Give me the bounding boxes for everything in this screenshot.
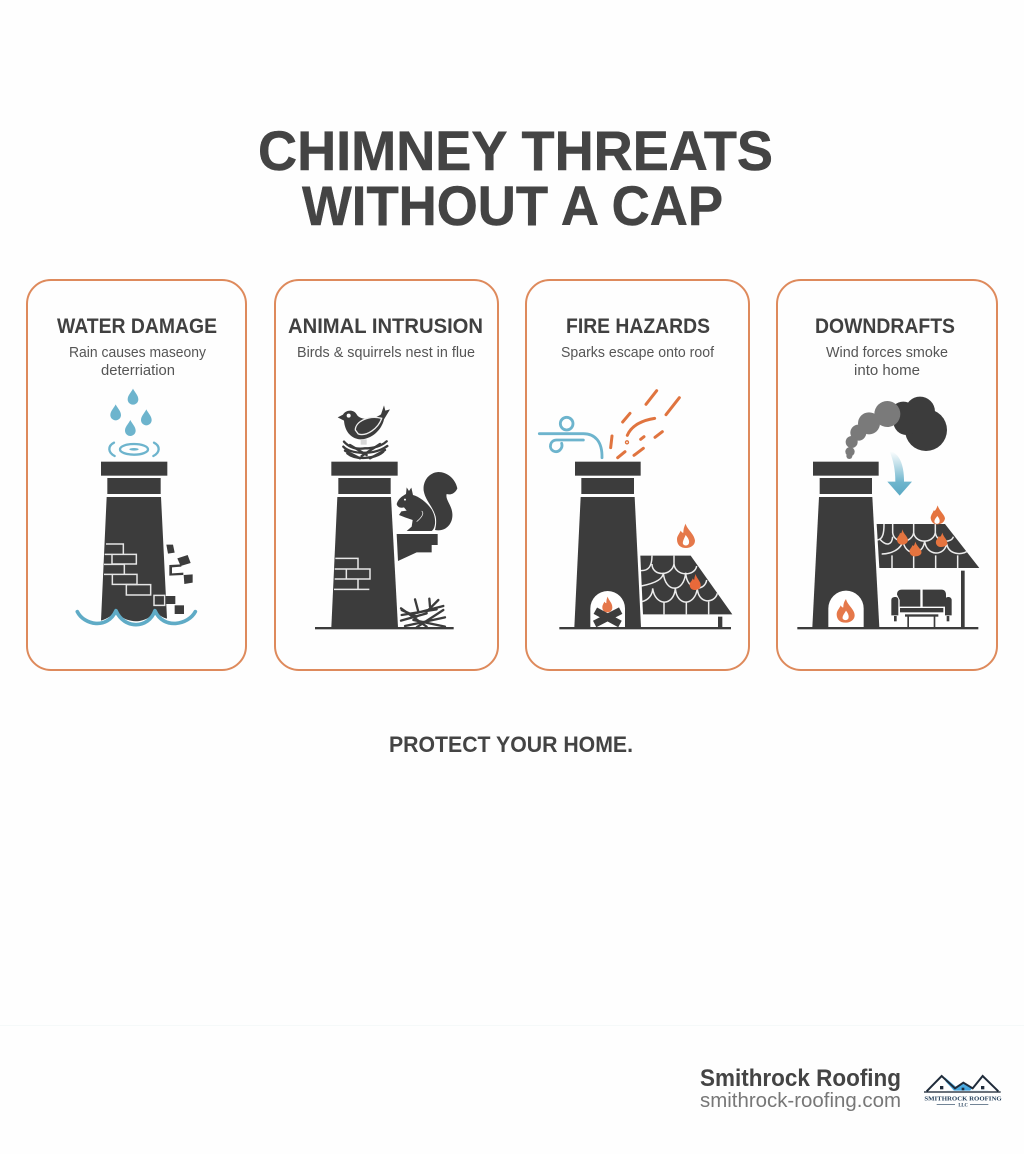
- footer divider: [0, 1025, 1024, 1026]
- logo suffix: LLC: [958, 1104, 969, 1109]
- title: CHIMNEY THREATS: [258, 119, 773, 182]
- chimney: [559, 462, 731, 629]
- ledge: [397, 534, 438, 561]
- roof post: [718, 617, 722, 627]
- icon: houses: [924, 1076, 1001, 1093]
- footer brand text: Smithrock Roofing: [700, 1065, 901, 1092]
- icon: leaking chimney with water: [77, 389, 195, 625]
- text: water damage description: deterriation: [101, 363, 175, 379]
- icon: squirrel: [397, 472, 457, 531]
- chimney: [797, 462, 978, 629]
- text: water damage description: [69, 345, 207, 379]
- tagline: PROTECT YOUR HOME.: [389, 732, 633, 757]
- heading: downdrafts: DOWNDRAFTS: [815, 315, 955, 338]
- icon: roof flame small: [690, 574, 701, 590]
- icon: flame on ridge: [931, 505, 945, 524]
- icon: chimney with sparks and roof: [539, 391, 732, 629]
- text: fire hazards description: Sparks escape onto roof: [561, 345, 715, 361]
- icon: sparks: [611, 391, 679, 458]
- text: animal intrusion description: Birds & squirrels nest in flue: [297, 345, 475, 361]
- logo wordmark: SMITHROCK ROOFING: [924, 1095, 1002, 1102]
- icon: sofa: [891, 590, 952, 627]
- icon: fireplace flame: [837, 599, 855, 623]
- chimney: [315, 462, 454, 629]
- footer brand text: [700, 1065, 901, 1112]
- icon: chimney with downdraft: [797, 397, 979, 629]
- heading: animal intrusion: ANIMAL INTRUSION: [288, 315, 483, 338]
- icon: flame above roof: [677, 524, 695, 548]
- title: WITHOUT A CAP: [302, 174, 723, 237]
- icon: dark smoke cloud: [890, 397, 947, 451]
- roof shingles: [877, 524, 967, 568]
- bricks: [334, 558, 370, 589]
- chimney: [101, 462, 167, 621]
- text: downdrafts description: into home: [854, 363, 920, 379]
- icon: wind: [539, 417, 602, 458]
- logo rules: [937, 1103, 988, 1105]
- icon: roof flames: [897, 529, 947, 556]
- icon: chimney with animals: [315, 405, 457, 629]
- icon: rain drops: [110, 389, 152, 436]
- roof post: [961, 571, 965, 627]
- icon: fireplace flame: [602, 597, 612, 612]
- heading: fire hazards: FIRE HAZARDS: [566, 315, 710, 338]
- broken bricks: [165, 545, 193, 614]
- panel: water damage: [27, 280, 246, 670]
- title: [258, 119, 773, 237]
- text: downdrafts description: Wind forces smoke: [826, 345, 948, 361]
- icon: nest: [343, 441, 387, 458]
- panel: animal intrusion: [275, 280, 498, 670]
- footer brand text: smithrock-roofing.com: [700, 1089, 901, 1112]
- icon: bird: [338, 405, 390, 445]
- icon: fireplace: [590, 591, 625, 627]
- text: downdrafts description: [826, 345, 948, 379]
- roof: [640, 556, 732, 614]
- panel: fire hazards: [526, 280, 749, 670]
- logo: [924, 1076, 1002, 1109]
- roof: [877, 524, 979, 568]
- icon: fireplace: [828, 591, 864, 627]
- icon: stick pile: [401, 599, 445, 627]
- panel: downdrafts: [777, 280, 997, 670]
- text: water damage description: Rain causes maseony: [69, 345, 207, 361]
- icon: logs: [595, 611, 621, 624]
- icon: grey smoke plume: [845, 401, 900, 459]
- heading: water damage: WATER DAMAGE: [57, 315, 217, 338]
- cracked bricks: [104, 544, 165, 605]
- icon: down arrow: [887, 451, 912, 496]
- icon: flood wave: [77, 611, 195, 625]
- roof shingles: [641, 556, 717, 614]
- icon: ripple: [109, 443, 159, 456]
